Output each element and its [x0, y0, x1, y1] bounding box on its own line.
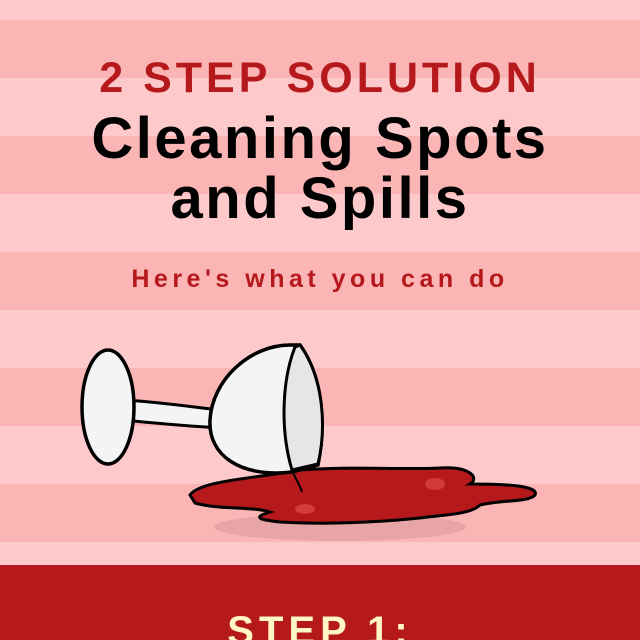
title	[91, 106, 549, 231]
heading: 2 step solution: 2 STEP SOLUTION	[99, 54, 541, 102]
title: and Spills	[171, 166, 469, 231]
title: Cleaning Spots	[91, 106, 549, 171]
subtitle: Here's what you can do	[131, 265, 509, 293]
red band: step 1	[0, 565, 640, 640]
